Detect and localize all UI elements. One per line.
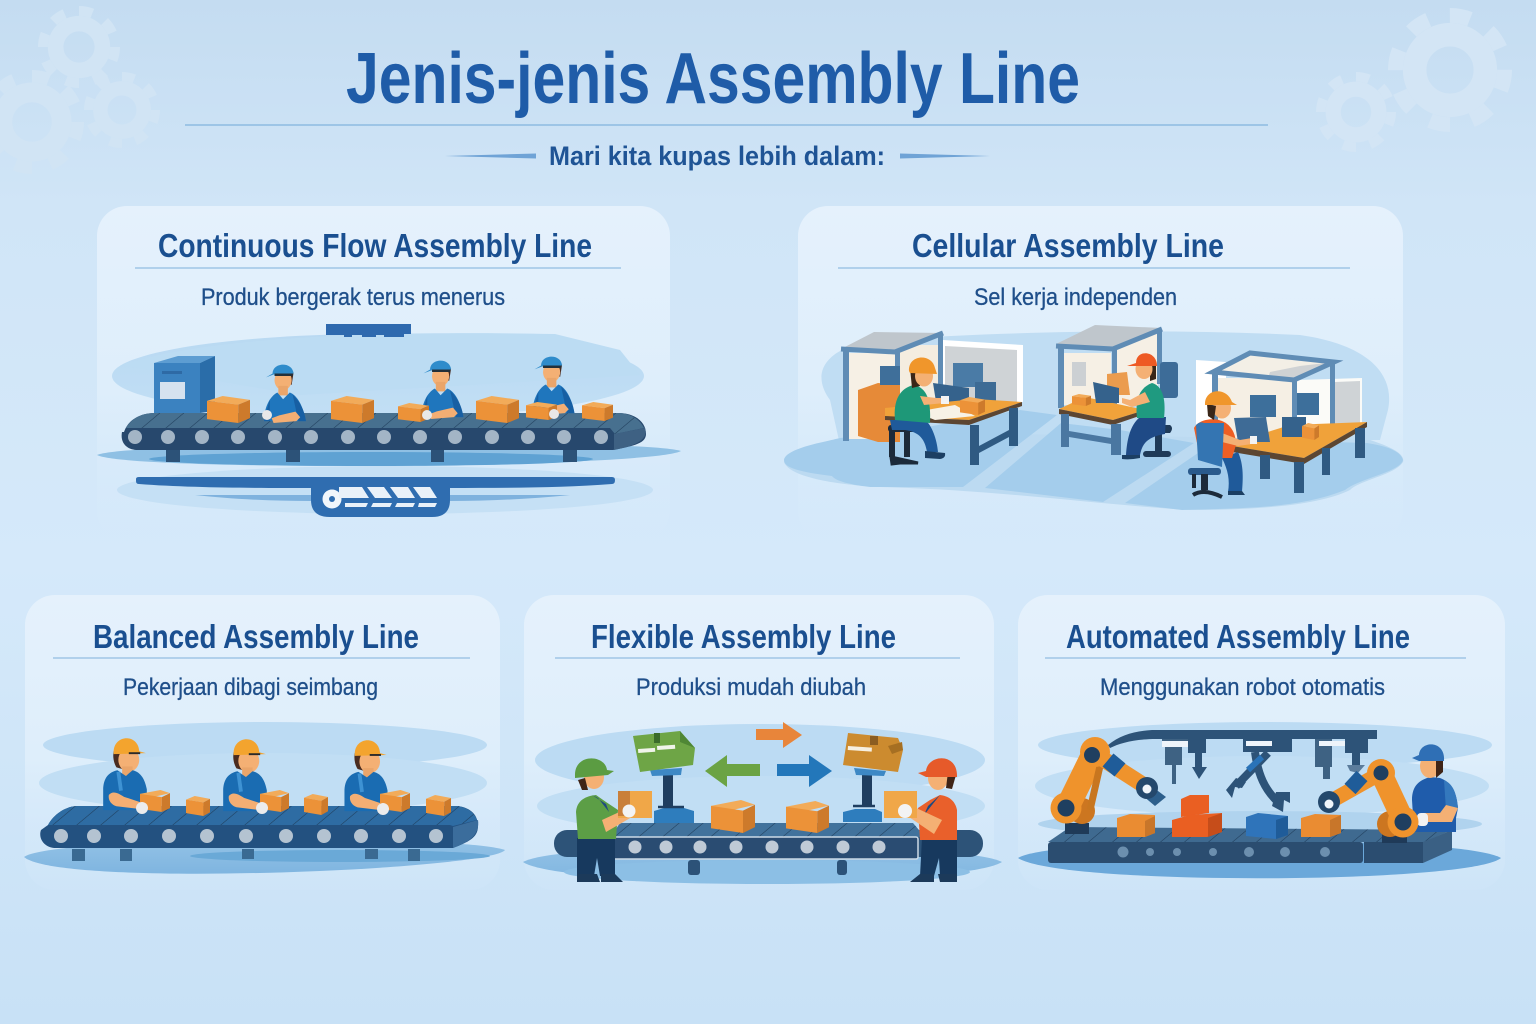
machine box [154,356,215,413]
icon: gears top right [1321,15,1505,147]
cell 3 [1188,353,1367,497]
boxes [136,790,451,816]
heading: Cellular: Cellular Assembly Line [912,227,1224,264]
conveyor [554,823,983,875]
title: Jenis-jenis Assembly Line [346,39,1080,119]
panel: Flexible Assembly Line [523,595,1002,890]
workers [103,738,388,811]
panel: Balanced Assembly Line [24,595,505,890]
illustration: continuous conveyor [97,324,681,517]
worker: orange [884,758,957,882]
tools [1162,739,1368,812]
conveyor legs [166,449,577,462]
right scanner with orange box [843,733,903,822]
title divider [185,124,1268,126]
worker [888,357,949,464]
boxes [711,800,829,833]
icon: top rail [326,324,411,337]
arrow: blue right [777,755,832,787]
icon: conveyor badge [136,477,615,517]
cell 2 [1056,325,1178,459]
description: Continuous Flow: Produk bergerak terus menerus [201,284,505,311]
panel: Cellular Assembly Line [784,206,1403,541]
worker [1188,391,1257,497]
floor tiles [784,410,1403,510]
description: Automated: Menggunakan robot otomatis [1100,674,1385,701]
worker [1122,353,1172,459]
overhead rail [1108,730,1377,748]
heading: Flexible: Flexible Assembly Line [591,618,896,655]
robot arm: right [1318,759,1418,843]
heading: Balanced: Balanced Assembly Line [93,618,419,655]
robot arm: left [1050,737,1166,834]
heading: Continuous Flow: Continuous Flow Assembly Line [158,227,592,264]
conveyor belt [40,806,478,848]
illustration: automated line [1018,722,1501,878]
illustration: flexible line [523,722,1002,884]
worker: robot operator [1412,744,1458,832]
illustration: balanced conveyor [24,722,505,874]
cell 1 [841,332,1023,465]
panel: Automated Assembly Line [1018,595,1505,890]
workers [264,357,574,423]
illustration: work cells [784,325,1403,510]
boxes [1117,795,1341,839]
arrow: orange right [756,722,802,748]
description: Flexible: Produksi mudah diubah [636,674,866,701]
conveyor [1048,827,1452,863]
subtitle [445,141,990,171]
panel: Continuous Flow Assembly Line [97,206,681,541]
boxes [207,396,613,423]
description: Cellular: Sel kerja independen [974,284,1177,311]
icon: gears top left [0,11,155,168]
description: Balanced: Pekerjaan dibagi seimbang [123,674,378,701]
left scanner with green box [633,731,695,823]
subtitle: Mari kita kupas lebih dalam: [549,141,885,171]
heading: Automated: Automated Assembly Line [1066,618,1410,655]
conveyor legs [72,849,420,861]
arrow: green left [705,755,760,787]
worker: green [575,758,652,882]
conveyor belt [122,413,646,450]
